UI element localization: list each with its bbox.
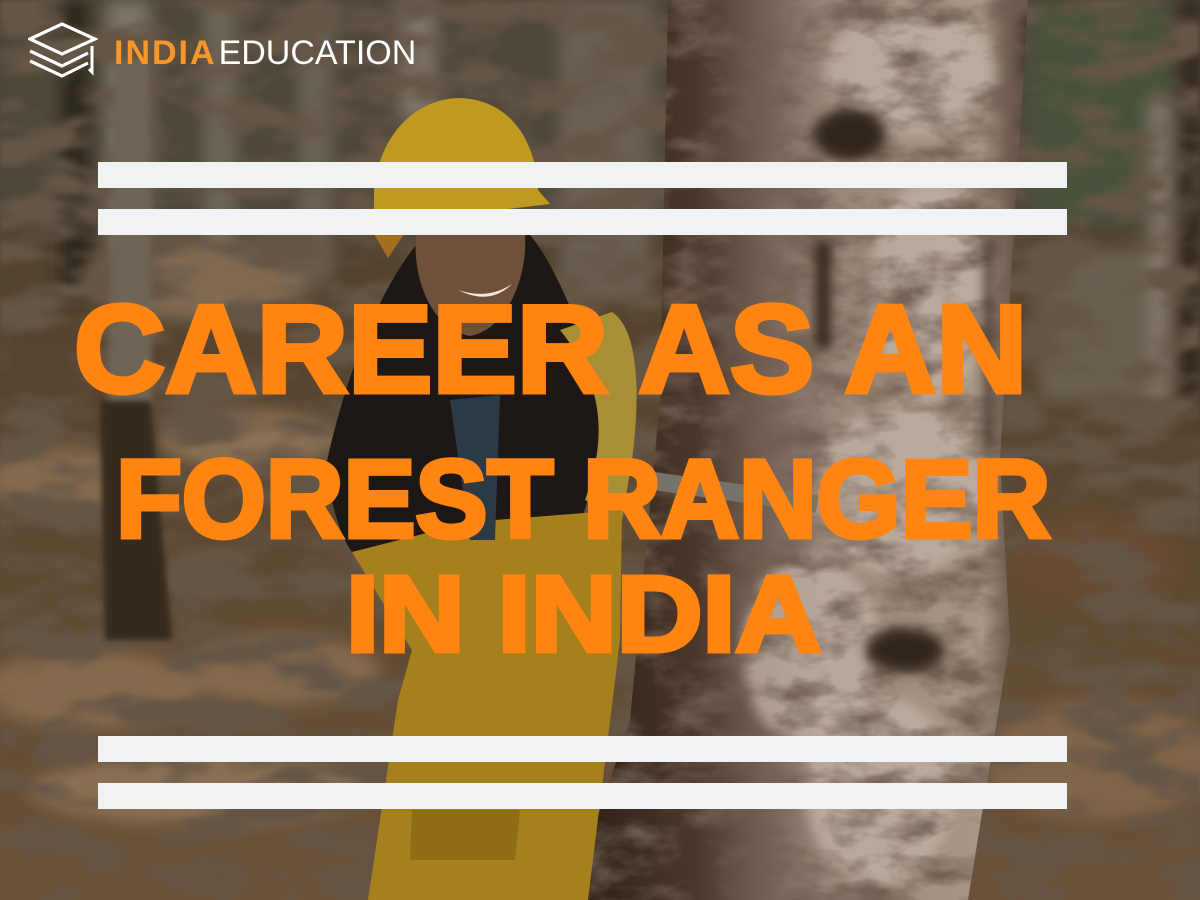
decorative white bars: bottom xyxy=(98,736,1067,809)
tree trunk xyxy=(560,0,1040,900)
title xyxy=(74,281,1052,674)
logo wordmark: INDIAEDUCATION xyxy=(114,34,416,72)
logo: India Education xyxy=(28,22,416,78)
decorative white bars: top xyxy=(98,162,1067,235)
title line 1: CAREER AS AN xyxy=(74,281,1027,419)
icon: graduation cap stacked books xyxy=(28,22,98,78)
title line 2: FOREST RANGER xyxy=(116,438,1050,561)
woman xyxy=(325,98,818,900)
title line 3: IN INDIA xyxy=(346,553,821,674)
